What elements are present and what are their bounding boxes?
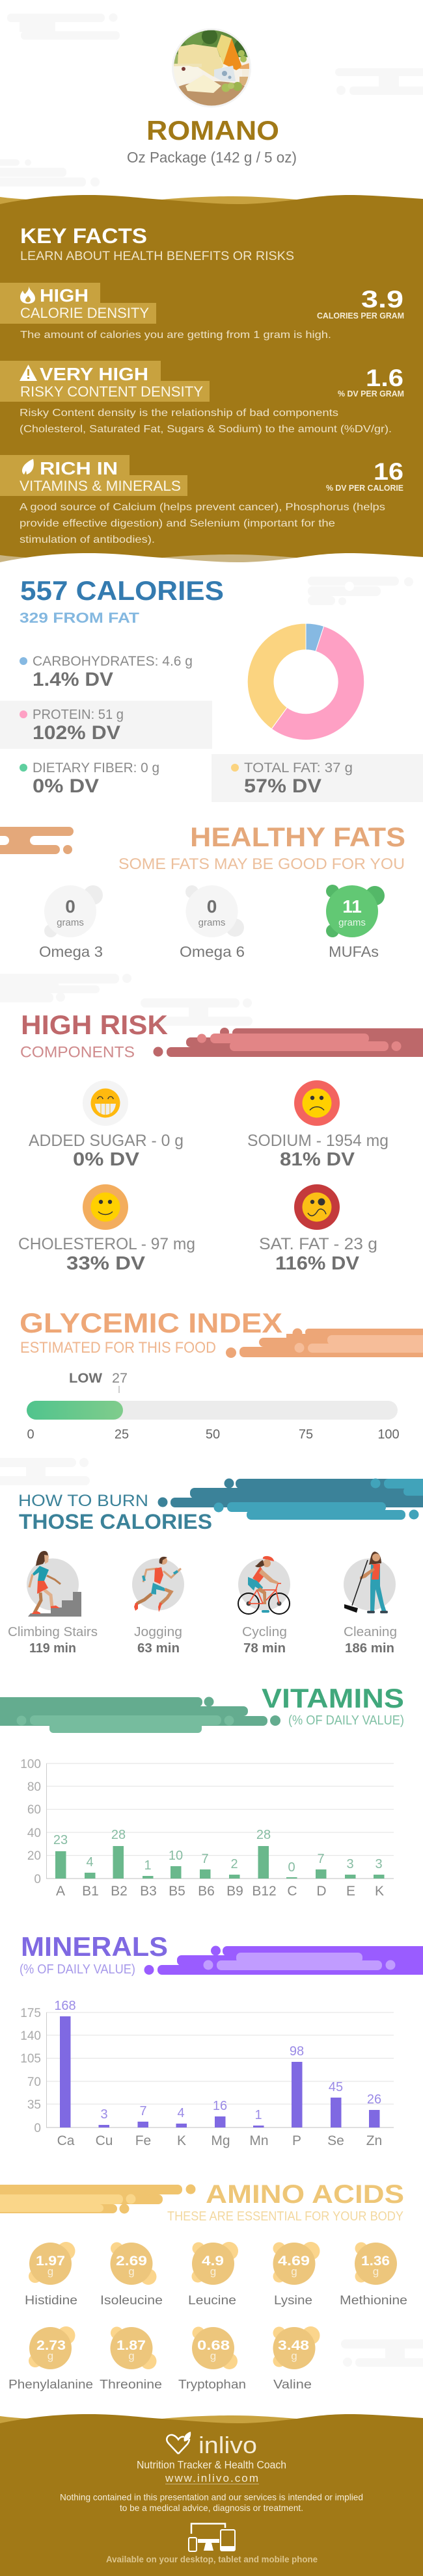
tag: rich in vitamins and minerals: RICH IN [40,458,118,478]
legend: protein: 102% DV [33,722,120,744]
tag: high calorie density: CALORIE DENSITY [20,305,149,321]
gauge: glycemic index: LOW [69,1371,102,1386]
activity: cleaning [344,1552,397,1656]
subheading: components: COMPONENTS [20,1044,135,1061]
amino acid: threonine: g [128,2350,135,2362]
amino acid: phenylalanine: Phenylalanine [8,2378,93,2392]
food photo: cheese board [170,29,254,109]
amino acid: tryptophan: 0.68 [197,2338,230,2353]
amino acid: valine: 3.48 [278,2338,309,2353]
bar chart: minerals: 70 [27,2075,41,2089]
subheading: key facts: LEARN ABOUT HEALTH BENEFITS OR RISKS [20,249,294,263]
amino acid: valine [273,2326,320,2392]
bar chart: vitamins: 80 [27,1780,41,1794]
risk item: cholesterol: CHOLESTEROL - 97 mg [18,1235,195,1253]
amino acid: leucine [188,2242,238,2308]
amino acid: lysine [273,2242,320,2308]
metric: calories per gram: 3.9 [361,286,403,313]
bar chart: minerals: 105 [20,2052,41,2066]
metric: calories per gram [317,286,404,320]
bar chart: vitamins: 2 [230,1857,238,1871]
decoration: vitamins stripes [0,1697,280,1733]
amino acid: tryptophan: Tryptophan [178,2378,246,2392]
bar chart: vitamins: B12 [252,1884,277,1899]
amino acid: isoleucine [100,2243,163,2308]
bar chart: vitamins: B9 [226,1884,243,1899]
icon: devices [189,2523,235,2551]
decoration: glycemic index stripes [226,1329,423,1358]
heading: glycemic index: GLYCEMIC INDEX [20,1308,282,1339]
risk item: cholesterol: 33% DV [66,1253,146,1274]
activity: cycling: 78 min [243,1641,286,1656]
bar chart: minerals: 7 [139,2104,147,2118]
bar chart: minerals: Mn [249,2133,269,2148]
tag: rich in vitamins and minerals [0,455,187,496]
bar chart: vitamins: B5 [169,1884,185,1899]
gauge: glycemic index [27,1371,400,1442]
legend: dietary fiber: 0% DV [33,775,99,797]
subheading: glycemic index: ESTIMATED FOR THIS FOOD [20,1339,216,1357]
bar chart: vitamins: 40 [27,1827,41,1840]
amino acid: leucine: g [210,2265,216,2278]
heading: calories: 557 CALORIES [20,575,224,606]
tag: very high risky content density: RISKY CONTENT DENSITY [20,384,203,400]
legend: carbohydrates: 1.4% DV [33,669,113,690]
bar chart: vitamins: C [287,1884,297,1899]
risk item: sodium: SODIUM - 1954 mg [247,1132,389,1150]
activity: cleaning: 186 min [345,1641,394,1656]
amino acid: isoleucine: Isoleucine [100,2294,163,2308]
bar chart: vitamins [20,1758,394,1899]
panel: footer [0,2414,423,2576]
gauge: glycemic index: 0 [27,1427,34,1442]
risk item: saturated fat: SAT. FAT - 23 g [259,1235,377,1253]
bar chart: minerals: 140 [20,2029,41,2043]
text: tagline: Nutrition Tracker & Health Coach [137,2458,286,2471]
legend: dietary fiber: DIETARY FIBER: 0 g [33,761,159,775]
bar chart: minerals: 3 [100,2107,108,2122]
amino acid: threonine: Threonine [100,2378,162,2392]
bar chart: vitamins: E [346,1884,355,1899]
bar chart: vitamins: 3 [346,1857,354,1871]
bar chart: minerals: Mg [211,2133,230,2148]
text: vitamins and minerals description: provide effective digestion) and Selenium (important for the [20,518,335,529]
bar chart: vitamins: B6 [198,1884,215,1899]
heading: vitamins: VITAMINS [262,1683,404,1713]
bar chart: vitamins: 60 [27,1803,41,1817]
bar chart: minerals: 4 [177,2106,185,2120]
text: risky content description [20,408,392,435]
legend: protein [0,701,212,749]
bar chart: minerals: 0 [34,2122,41,2135]
activity: cycling: Cycling [242,1625,287,1639]
heading: how to burn those calories [18,1492,212,1533]
decoration: high risk stripes [154,1028,423,1057]
risk item: saturated fat [259,1184,377,1274]
heading: amino acids: AMINO ACIDS [206,2180,404,2209]
donut chart: macronutrients [247,623,364,740]
stat: omega 3: Omega 3 [39,943,103,960]
bar chart: minerals: 45 [329,2080,343,2094]
activity: jogging [132,1557,184,1656]
amino acid: methionine: 1.36 [361,2254,390,2269]
text: vitamins and minerals description: A good source of Calcium (helps prevent cancer), Phosphorus (helps [20,502,385,513]
decoration: minerals stripes [144,1946,423,1975]
text: availability: Available on your desktop, tablet and mobile phone [106,2554,318,2564]
text: vitamins and minerals description: stimulation of antibodies). [20,534,155,545]
activity: climbing stairs: Climbing Stairs [8,1625,98,1639]
amino acid: tryptophan: g [210,2350,216,2362]
bar chart: vitamins: 4 [86,1855,94,1869]
amino acid: leucine: 4.9 [202,2254,224,2269]
stat: omega 6 [180,885,245,960]
amino acid: valine: g [291,2350,297,2362]
text: risky content description: (Cholesterol, Saturated Fat, Sugars & Sodium) to the amount (%DV/gr). [20,424,392,435]
bar chart: vitamins: 28 [256,1828,271,1842]
stat: mufas: 11 [342,896,362,917]
risk item: saturated fat: 116% DV [275,1253,360,1274]
decoration: amino acids stripes [0,2184,195,2214]
bar chart: minerals: Cu [96,2133,113,2148]
legend: protein: PROTEIN: 51 g [33,707,124,722]
amino acid: lysine: Lysine [274,2294,312,2308]
bar chart: vitamins: K [375,1884,384,1899]
gauge: glycemic index: 100 [377,1427,400,1442]
tag: high calorie density [0,283,156,324]
tag: very high risky content density: VERY HIGH [40,364,148,384]
amino acid: isoleucine: 2.69 [116,2254,147,2269]
metric: dv per calorie: 16 [374,458,403,485]
activity: cycling [238,1556,290,1656]
amino acid: lysine: 4.69 [278,2254,310,2269]
bar chart: minerals: 175 [20,2007,41,2020]
bar chart: vitamins: 1 [144,1858,152,1873]
heading: healthy fats: HEALTHY FATS [190,822,405,852]
activity: climbing stairs [8,1551,98,1656]
bar chart: vitamins: 0 [34,1873,41,1886]
title: ROMANO [146,115,279,146]
heading: key facts: KEY FACTS [20,224,147,248]
tag: rich in vitamins and minerals: VITAMINS & MINERALS [20,478,181,494]
bar chart: vitamins: 10 [169,1849,183,1863]
serving size: Oz Package (142 g / 5 oz) [127,149,297,166]
gauge: glycemic index: 25 [115,1427,129,1442]
text: calorie density description: The amount of calories you are getting from 1 gram is high. [20,330,331,341]
amino acid: histidine: g [48,2265,53,2278]
risk item: added sugar: 0% DV [73,1149,140,1170]
bar chart: minerals: 16 [213,2099,227,2113]
gauge: glycemic index: 75 [299,1427,313,1442]
bar chart: minerals: Zn [366,2133,382,2148]
logo: inlivo [167,2432,257,2458]
amino acid: valine: Valine [273,2378,312,2392]
amino acid: histidine: 1.97 [36,2254,65,2269]
gauge: glycemic index: 27 [112,1371,128,1386]
gauge: glycemic index: 50 [206,1427,220,1442]
risk item: added sugar: ADDED SUGAR - 0 g [29,1132,184,1150]
legend: carbohydrates [20,654,193,690]
link: website: www.inlivo.com [165,2472,258,2484]
bar chart: minerals [20,1999,394,2148]
amino acid: methionine: g [373,2265,379,2278]
heading: how to burn those calories: HOW TO BURN [18,1492,148,1510]
legend: total fat: TOTAL FAT: 37 g [244,761,353,775]
bar chart: vitamins: D [316,1884,327,1899]
amino acid: leucine: Leucine [188,2294,236,2308]
stat: omega 3: 0 [65,896,75,917]
bar chart: minerals: Se [327,2133,344,2148]
stat: omega 6: Omega 6 [180,943,245,960]
stat: mufas: MUFAs [329,943,379,960]
risk item: sodium: 81% DV [280,1149,355,1170]
bar chart: minerals: 1 [254,2108,262,2122]
activity: jogging: Jogging [134,1625,182,1639]
metric: dv per gram: 1.6 [366,365,403,391]
bar chart: minerals: Fe [135,2133,151,2148]
legend: carbohydrates: CARBOHYDRATES: 4.6 g [33,654,193,669]
activity: jogging: 63 min [137,1641,180,1656]
bar chart: vitamins: 3 [375,1857,383,1871]
heading: minerals: MINERALS [21,1931,168,1962]
bar chart: vitamins: 20 [27,1849,41,1863]
bar chart: minerals: 168 [54,1999,76,2013]
decoration: healthy fats stripes [0,827,95,854]
activity: climbing stairs: 119 min [29,1641,76,1656]
metric: dv per calorie: % DV PER CALORIE [326,483,403,493]
activity: cleaning: Cleaning [344,1625,397,1639]
stat: omega 6: 0 [207,896,217,917]
bar chart: vitamins: 0 [288,1860,295,1875]
heading: how to burn those calories: THOSE CALORIES [19,1510,212,1533]
metric: dv per calorie [326,458,403,493]
bar chart: vitamins: B2 [111,1884,128,1899]
subheading: healthy fats: SOME FATS MAY BE GOOD FOR YOU [118,855,405,873]
bar chart: vitamins: 7 [317,1852,325,1866]
bar chart: minerals: P [292,2133,301,2148]
bar chart: minerals: 98 [290,2044,304,2059]
risk item: added sugar [29,1080,184,1170]
amino acid: methionine: Methionine [340,2294,407,2308]
amino acid: histidine [25,2242,77,2308]
bar chart: vitamins: 100 [20,1758,41,1771]
subheading: minerals: (% OF DAILY VALUE) [20,1962,135,1977]
metric: calories per gram: CALORIES PER GRAM [317,311,404,320]
bar chart: minerals: Ca [57,2133,75,2148]
risk item: cholesterol [18,1184,195,1274]
amino acid: phenylalanine: g [48,2350,53,2362]
heading: high risk: HIGH RISK [21,1009,168,1040]
bar chart: minerals: K [177,2133,186,2148]
amino acid: histidine: Histidine [25,2294,77,2308]
metric: dv per gram: % DV PER GRAM [338,389,404,398]
text: disclaimer: Nothing contained in this presentation and our services is intended or implied [60,2492,363,2503]
stat: mufas [326,885,385,960]
tag: high calorie density: HIGH [40,285,89,306]
amino acid: phenylalanine [8,2326,93,2392]
subheading: vitamins: (% OF DAILY VALUE) [288,1713,404,1728]
decoration: burn calories stripes [157,1478,423,1520]
bar chart: vitamins: B3 [140,1884,157,1899]
text: risky content description: Risky Content density is the relationship of bad components [20,408,338,419]
bar chart: vitamins: 28 [111,1828,126,1842]
tag: very high risky content density [0,361,210,402]
bar chart: vitamins: 7 [201,1852,209,1866]
bar chart: minerals: 35 [27,2098,41,2112]
legend: total fat: 57% DV [244,775,321,797]
stat: omega 3 [39,885,103,960]
bar chart: vitamins: A [56,1884,65,1899]
bar chart: vitamins: B1 [82,1884,99,1899]
amino acid: lysine: g [291,2265,297,2278]
amino acid: methionine [340,2243,407,2308]
stat: omega 3: grams [57,917,84,928]
stat: omega 6: grams [198,917,225,928]
subheading: calories from fat: 329 FROM FAT [20,610,140,626]
amino acid: isoleucine: g [128,2265,135,2278]
legend: dietary fiber [20,761,159,797]
subheading: amino acids: THESE ARE ESSENTIAL FOR YOUR BODY [167,2209,403,2224]
text: disclaimer: to be a medical advice, diagnosis or treatment. [120,2503,303,2513]
bar chart: vitamins: 23 [53,1833,68,1847]
legend: total fat [212,754,423,802]
amino acid: tryptophan [178,2327,246,2392]
stat: mufas: grams [338,917,366,928]
amino acid: threonine [100,2327,162,2392]
amino acid: phenylalanine: 2.73 [36,2338,66,2353]
text: disclaimer [60,2492,363,2513]
text: vitamins and minerals description [20,502,385,545]
metric: dv per gram [338,365,404,398]
bar chart: minerals: 26 [367,2092,381,2107]
amino acid: threonine: 1.87 [116,2338,146,2353]
logo: inlivo: inlivo [198,2432,257,2458]
panel: key facts [0,195,423,575]
risk item: sodium [247,1080,389,1170]
